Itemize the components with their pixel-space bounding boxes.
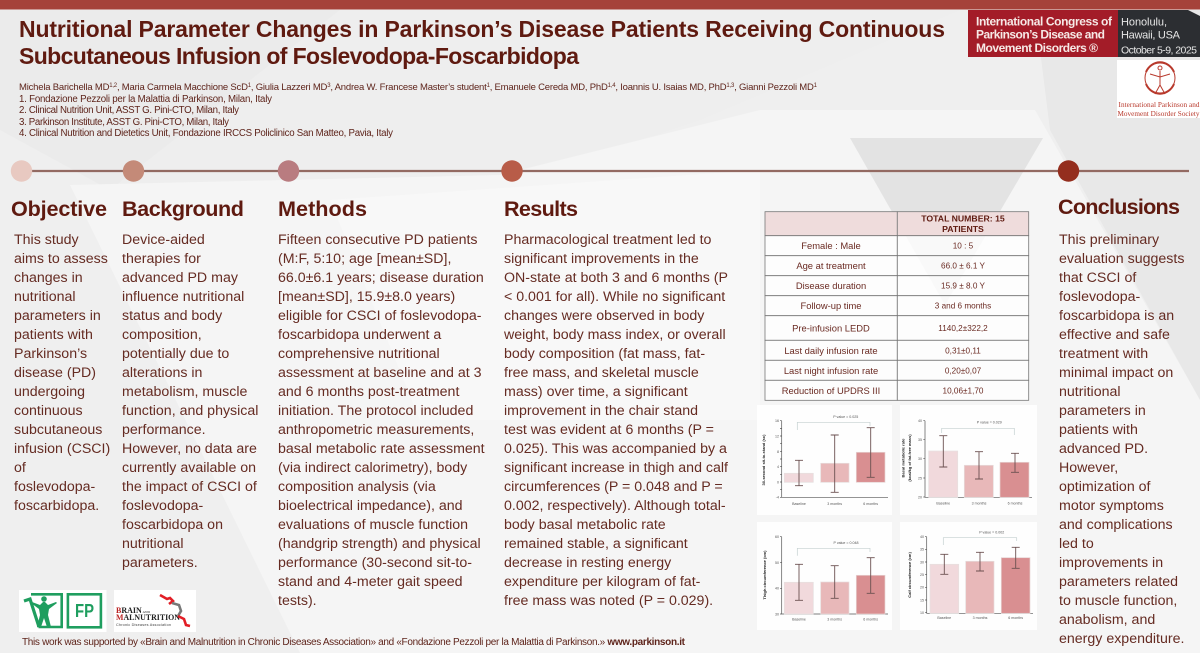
chart: thigh circumference: 60 — [775, 535, 779, 539]
society logo — [1117, 60, 1200, 118]
authors and affiliations: 1,3 — [726, 83, 735, 89]
text: objective: changes in — [14, 270, 83, 286]
table: patient characteristics: Pre-infusion LEDD — [792, 322, 870, 334]
text: background: therapies for — [122, 251, 201, 267]
text: conclusions: and complications — [1059, 517, 1173, 533]
text: methods: eligible for CSCI of foslevodopa- — [278, 308, 482, 324]
text: background: metabolism, muscle — [122, 384, 247, 400]
text: background: advanced PD may — [122, 270, 239, 286]
chart: calf circumference: Calf circumference (cm) — [907, 552, 912, 598]
text: conclusions: minimal impact on — [1059, 365, 1173, 381]
congress banner: Hawaii, USA — [1121, 30, 1181, 42]
text: objective: infusion (CSCI) — [14, 441, 110, 457]
text: methods: (via indirect calorimetry), body — [278, 460, 468, 476]
chart: basal metabolic rate: 20 — [918, 496, 922, 500]
text: results: Pharmacological treatment led to — [504, 232, 712, 248]
marker: conclusions — [1058, 160, 1079, 182]
congress banner: October 5-9, 2025 — [1121, 44, 1197, 56]
authors and affiliations: 3 — [327, 83, 331, 89]
authors and affiliations — [19, 82, 818, 139]
chart: 30-second sit-to-stand: 3 months — [827, 502, 842, 506]
authors and affiliations: 1 — [814, 83, 818, 89]
table: patient characteristics: Follow-up time — [801, 300, 861, 311]
text: objective: This study — [14, 232, 80, 248]
text: results: free mass, and skeletal muscle — [504, 365, 699, 381]
chart: 30-second sit-to-stand: P value = 0.025 — [833, 415, 858, 419]
text: conclusions: This preliminary — [1059, 232, 1160, 248]
text: methods: initiation. The protocol included — [278, 403, 473, 419]
table: patient characteristics: 10 : 5 — [953, 242, 974, 250]
text: background: foscarbidopa on — [122, 517, 223, 533]
text: conclusions: evaluation suggests — [1059, 251, 1184, 267]
chart: 30-second sit-to-stand: 4 — [777, 465, 779, 469]
congress banner: Honolulu, — [1121, 16, 1167, 28]
chart: basal metabolic rate: 30 — [918, 457, 922, 461]
top bar — [0, 0, 1200, 10]
chart: basal metabolic rate: 3 months — [972, 502, 987, 506]
text: background: nutritional — [122, 536, 184, 552]
chart: calf circumference: 20 — [920, 586, 924, 590]
text: conclusions: improvements in — [1059, 555, 1163, 571]
logo: Brain and Malnutrition — [114, 590, 196, 632]
chart: calf circumference: P value = 0.002 — [979, 530, 1004, 534]
table: patient characteristics: 15.9 ± 8.0 Y — [941, 282, 986, 290]
text: background: status and body — [122, 308, 223, 324]
table: patient characteristics: Age at treatment — [796, 260, 866, 271]
text: conclusions: advanced PD. — [1059, 441, 1148, 457]
text: conclusions: effective and safe — [1059, 327, 1170, 343]
society logo: International Parkinson and — [1118, 101, 1200, 109]
text: methods: bioelectrical impedance), and — [278, 498, 463, 514]
chart: basal metabolic rate: 40 — [918, 419, 922, 423]
chart: thigh circumference: Thigh circumference (cm) — [762, 550, 767, 599]
chart: basal metabolic rate: (kcal/kg of fat-free mass) — [907, 434, 912, 482]
marker: results — [501, 160, 523, 182]
text: background: composition, — [122, 327, 202, 343]
society logo: Movement Disorder Society — [1118, 110, 1200, 118]
chart: calf circumference: 35 — [920, 548, 924, 552]
chart: basal metabolic rate: Baseline — [936, 502, 950, 506]
table: patient characteristics: PATIENTS — [942, 224, 984, 234]
chart: thigh circumference: 6 months — [863, 618, 878, 622]
text: results: changes were observed in body — [504, 308, 705, 324]
text: results: weight, body mass index, or overall — [503, 327, 726, 343]
text: conclusions: optimization of — [1059, 479, 1151, 495]
text: methods: Fifteen consecutive PD patients — [278, 232, 478, 248]
text: results: free mass was noted (P = 0.029). — [504, 593, 713, 609]
text: background: parameters. — [122, 555, 198, 571]
text: methods: stand and 4-meter gait speed — [278, 574, 463, 590]
chart: calf circumference: 3 months — [973, 616, 988, 620]
text: conclusions: foslevodopa- — [1059, 289, 1141, 305]
text: conclusions: patients with — [1059, 422, 1138, 438]
text: objective: disease (PD) — [14, 365, 96, 381]
text: objective: of — [14, 460, 26, 476]
chart: calf circumference: 40 — [920, 535, 924, 539]
congress banner: Movement Disorders ® — [976, 41, 1098, 55]
table: patient characteristics: Last night infusion rate — [784, 365, 878, 376]
text: results: mass) over time, a significant — [504, 384, 688, 400]
table: patient characteristics: TOTAL NUMBER: 15 — [921, 214, 1005, 224]
text: results: improvement in the chair stand — [504, 403, 698, 419]
text: background: Device-aided — [122, 232, 205, 248]
text: background: function, and physical — [122, 403, 258, 419]
text: methods: (M:F, 5:10; age [mean±SD], — [278, 251, 451, 267]
marker: objective — [11, 160, 32, 182]
text: objective: patients with — [14, 327, 93, 343]
chart: 30-second sit-to-stand: 0 — [777, 480, 779, 484]
authors and affiliations: 2. Clinical Nutrition Unit, ASST G. Pini-CTO, Milan, Italy — [19, 105, 239, 116]
text: background: alterations in — [122, 365, 202, 381]
chart: 30-second sit-to-stand: 6 months — [863, 502, 878, 506]
text: conclusions: led to — [1059, 536, 1094, 552]
text: background: However, no data are — [122, 441, 257, 457]
chart: calf circumference: Baseline — [937, 616, 951, 620]
authors and affiliations: 3. Parkinson Institute, ASST G. Pini-CTO, Milan, Italy — [19, 117, 229, 128]
authors and affiliations: 1,2 — [109, 83, 118, 89]
congress banner: Parkinson’s Disease and — [976, 28, 1105, 42]
heading: background: Background — [122, 196, 244, 221]
authors and affiliations: 1 — [487, 83, 491, 89]
text: results: significant improvements in the — [504, 251, 699, 267]
chart: basal metabolic rate: 35 — [918, 438, 922, 442]
table: patient characteristics: Last daily infusion rate — [784, 345, 878, 356]
text: methods: [mean±SD], 15.9±8.0 years) — [278, 289, 455, 305]
chart: 30-second sit-to-stand: -4 — [776, 496, 779, 500]
text: results: < 0.001 for all). While no significant — [504, 289, 725, 305]
authors and affiliations: 1. Fondazione Pezzoli per la Malattia di Parkinson, Milan, Italy — [19, 94, 272, 105]
logo: Brain and Malnutrition: BRAIN AND — [116, 606, 151, 615]
authors and affiliations: , Andrea W. Francese Master’s student — [330, 82, 487, 93]
chart: thigh circumference: 40 — [775, 587, 779, 591]
marker: methods — [278, 160, 299, 182]
text: results: body composition (fat mass, fat- — [504, 346, 705, 362]
text: methods: anthropometric measurements, — [278, 422, 474, 438]
text: objective: foscarbidopa. — [14, 498, 99, 514]
logo: Fondazione Pezzoli — [19, 590, 106, 632]
text: results: circumferences (P = 0.048 and P = — [504, 479, 723, 495]
table: patient characteristics — [765, 212, 1029, 400]
chart: thigh circumference: P value = 0.048 — [833, 541, 859, 545]
text: objective: continuous — [14, 403, 83, 419]
text: methods: basal metabolic rate assessment — [278, 441, 485, 457]
text: conclusions: energy expenditure. — [1059, 631, 1184, 647]
table: patient characteristics: Disease duration — [796, 280, 866, 291]
text: objective: foslevodopa- — [14, 479, 96, 495]
text: conclusions: motor symptoms — [1059, 498, 1164, 514]
chart: basal metabolic rate — [900, 405, 1037, 515]
chart: calf circumference: 15 — [920, 598, 924, 602]
text: conclusions: nutritional — [1059, 384, 1121, 400]
authors and affiliations: , Ioannis U. Isaias MD, PhD — [615, 82, 727, 93]
table: patient characteristics: Reduction of UPDRS III — [782, 385, 880, 396]
chart: calf circumference — [900, 522, 1037, 630]
title — [19, 16, 945, 69]
text: results: body basal metabolic rate — [504, 517, 666, 533]
text: results: 0.002, respectively). Although total- — [504, 498, 726, 514]
text: conclusions: parameters in — [1059, 403, 1146, 419]
chart: thigh circumference: Baseline — [792, 618, 806, 622]
congress banner: International Congress of — [976, 14, 1113, 28]
timeline — [11, 160, 1189, 182]
chart: thigh circumference: 50 — [775, 561, 779, 565]
text: objective: aims to assess — [14, 251, 108, 267]
logo: Brain and Malnutrition: Chronic Diseases Association — [116, 623, 171, 627]
footer acknowledgement: This work was supported by «Brain and Malnutrition in Chronic Diseases Association» and «Fondazione Pezzoli per la Malattia di Parkinson.» www.parkinson.it — [22, 637, 686, 648]
logo: Fondazione Pezzoli: FP — [75, 601, 94, 621]
chart: basal metabolic rate: 25 — [918, 476, 922, 480]
authors and affiliations: 1 — [248, 83, 252, 89]
chart: thigh circumference — [757, 522, 892, 630]
text: methods: composition analysis (via — [278, 479, 436, 495]
authors and affiliations: Michela Barichella MD — [19, 82, 109, 93]
authors and affiliations: , Gianni Pezzoli MD — [734, 82, 814, 93]
chart: 30-second sit-to-stand: 30-second sit-to-stand (sc) — [761, 434, 766, 485]
text: results: test was evident at 6 months (P = — [504, 422, 714, 438]
text: background: the impact of CSCI of — [122, 479, 257, 495]
table: patient characteristics: 1140,2±322,2 — [938, 324, 988, 333]
text: background: foslevodopa- — [122, 498, 204, 514]
text: methods: tests). — [278, 593, 317, 609]
table: patient characteristics: 0,31±0,11 — [945, 346, 981, 356]
chart: basal metabolic rate: P value = 0.029 — [977, 420, 1002, 424]
text: background: performance. — [122, 422, 206, 438]
text: conclusions: that CSCI of — [1059, 270, 1136, 286]
text: objective: subcutaneous — [14, 422, 102, 438]
title: Subcutaneous Infusion of Foslevodopa-Foscarbidopa — [19, 43, 579, 69]
authors and affiliations: , Emanuele Cereda MD, PhD — [490, 82, 608, 93]
heading: results: Results — [504, 196, 578, 221]
text: results: 0.025). This was accompanied by a — [504, 441, 727, 457]
chart: 30-second sit-to-stand: 12 — [775, 434, 779, 438]
text: background: potentially due to — [122, 346, 229, 362]
text: background: currently available on — [122, 460, 256, 476]
chart: calf circumference: 25 — [920, 573, 924, 577]
text: methods: assessment at baseline and at 3 — [278, 365, 482, 381]
chart: 30-second sit-to-stand: Baseline — [792, 502, 806, 506]
chart: 30-second sit-to-stand: 8 — [777, 450, 779, 454]
table: patient characteristics: 66.0 ± 6.1 Y — [941, 262, 986, 270]
text: conclusions: anabolism, and — [1059, 612, 1155, 628]
text: results: significant increase in thigh and calf — [504, 460, 728, 476]
text: results: ON-state at both 3 and 6 months (P — [504, 270, 728, 286]
text: objective: undergoing — [14, 384, 85, 400]
text: methods: (handgrip strength) and physical — [278, 536, 481, 552]
authors and affiliations: 1,4 — [608, 83, 616, 89]
text: objective: nutritional — [14, 289, 76, 305]
chart: thigh circumference: 3 months — [827, 618, 842, 622]
text: results: expenditure per kilogram of fat- — [504, 574, 701, 590]
text: conclusions: However, — [1059, 460, 1118, 476]
chart: basal metabolic rate: Basal metabolic rate — [900, 438, 906, 477]
text: methods: foscarbidopa underwent a — [278, 327, 441, 343]
authors and affiliations: 4. Clinical Nutrition and Dietetics Unit, Fondazione IRCCS Policlinico San Matteo, Pavia, Italy — [19, 128, 393, 139]
chart: 30-second sit-to-stand: 16 — [775, 419, 779, 423]
text: conclusions: treatment with — [1059, 346, 1148, 362]
text: conclusions: to muscle function, — [1059, 593, 1177, 609]
table: patient characteristics: Female : Male — [801, 240, 861, 251]
logo: Brain and Malnutrition: MALNUTRITION — [116, 613, 180, 622]
text: conclusions: parameters related — [1059, 574, 1178, 590]
text: results: remained stable, a significant — [504, 536, 688, 552]
text: background: influence nutritional — [122, 289, 244, 305]
authors and affiliations: , Maria Carmela Macchione ScD — [117, 82, 248, 93]
title: Nutritional Parameter Changes in Parkinson’s Disease Patients Receiving Continuous — [19, 16, 945, 42]
chart: calf circumference: 10 — [920, 611, 924, 615]
chart: thigh circumference: 30 — [775, 612, 779, 616]
table: patient characteristics: 0,20±0,07 — [945, 366, 982, 376]
text: results: decrease in resting energy — [504, 555, 672, 571]
heading: conclusions: Conclusions — [1058, 194, 1180, 219]
text: objective: Parkinson’s — [14, 346, 87, 362]
text: objective: parameters in — [14, 308, 101, 324]
chart: basal metabolic rate: 6 months — [1008, 502, 1023, 506]
text: methods: evaluations of muscle function — [278, 517, 468, 533]
text: methods: performance (30-second sit-to- — [278, 555, 472, 571]
text: methods: 66.0±6.1 years; disease duration — [278, 270, 484, 286]
marker: background — [123, 160, 144, 182]
text: conclusions: foscarbidopa is an — [1059, 308, 1174, 324]
authors and affiliations: , Giulia Lazzeri MD — [251, 82, 328, 93]
heading: methods: Methods — [278, 196, 367, 221]
table: patient characteristics: 10,06±1,70 — [943, 386, 984, 396]
chart: calf circumference: 30 — [920, 560, 924, 564]
heading: objective: Objective — [11, 196, 107, 221]
chart: 30-second sit-to-stand — [757, 405, 892, 515]
chart: calf circumference: 6 months — [1008, 616, 1023, 620]
text: methods: comprehensive nutritional — [278, 346, 440, 362]
table: patient characteristics: 3 and 6 months — [935, 302, 991, 310]
congress banner — [968, 10, 1200, 57]
text: methods: and 6 months post-treatment — [278, 384, 459, 400]
